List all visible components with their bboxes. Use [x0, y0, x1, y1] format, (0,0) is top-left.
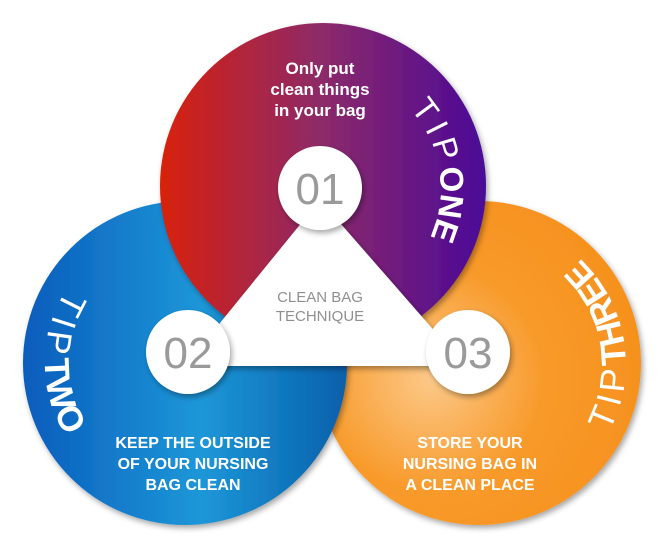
badge: 01: 01 — [296, 165, 344, 214]
badge: 03 — [426, 310, 510, 394]
panel: tip three circle — [331, 200, 646, 532]
text block: tip one: Only put — [286, 59, 355, 78]
panel: tip one circle — [158, 22, 492, 321]
text block: tip three: STORE YOUR — [417, 435, 523, 452]
badge: 03: 03 — [444, 329, 492, 378]
text block: tip two: KEEP THE OUTSIDE — [115, 435, 271, 452]
panel: tip two circle — [22, 202, 352, 532]
text block: tip three: A CLEAN PLACE — [405, 477, 535, 494]
triangle: clean bag technique — [185, 200, 465, 366]
text block: tip three: NURSING BAG IN — [403, 456, 537, 473]
heading: tip two: TIPTWO — [44, 298, 87, 432]
text block: tip one: in your bag — [274, 101, 366, 120]
text: center label: CLEAN BAG — [277, 289, 363, 306]
badge: 01 — [278, 146, 362, 230]
heading: tip three: TIPTHREE — [564, 260, 626, 424]
text block: tip two: BAG CLEAN — [145, 477, 241, 494]
text: center label: TECHNIQUE — [276, 308, 364, 325]
heading: tip one: TIPONE — [415, 95, 464, 244]
badge: 02: 02 — [164, 329, 212, 378]
text block: tip two: OF YOUR NURSING — [118, 456, 268, 473]
text block: tip one: clean things — [270, 80, 370, 99]
badge: 02 — [146, 310, 230, 394]
